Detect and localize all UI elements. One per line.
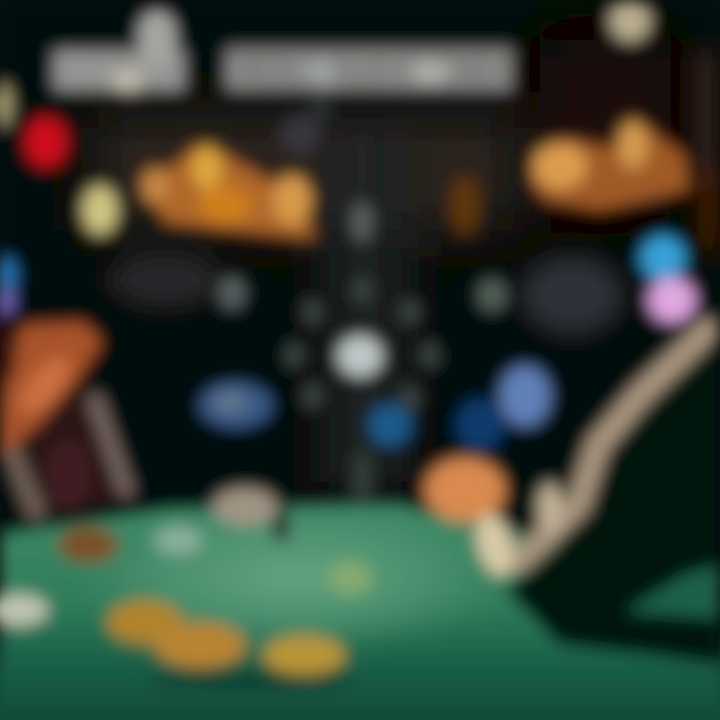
lights: colour panel right: [641, 236, 695, 322]
light: left pale: [0, 83, 12, 127]
chandelier: right: [530, 118, 688, 210]
card stack: [213, 488, 277, 526]
background: dark fill: [0, 0, 720, 560]
title: EXPERIENCE: [226, 48, 512, 95]
right player: wrist: [538, 483, 562, 533]
table: [0, 500, 720, 720]
lights: colour panel left: [0, 257, 16, 314]
card stack: shadow: [272, 509, 290, 543]
panels: dark grey side blobs: [107, 252, 624, 335]
blue lights: [200, 366, 550, 451]
chip: centre: [154, 622, 246, 668]
amber lamp: centre right: [449, 175, 481, 235]
right player: arm: [520, 330, 708, 560]
right player: table gap: [625, 565, 720, 618]
left player: sleeve left: [8, 445, 36, 512]
right player: fingers: [470, 510, 520, 580]
left player: [0, 314, 135, 515]
left player: highlight: [12, 349, 78, 421]
chip: brown: [58, 527, 118, 563]
card: white: [0, 594, 48, 626]
spot: yellow-green: [328, 561, 372, 595]
medallion: core: [338, 336, 382, 376]
title: [54, 10, 512, 124]
card: pale: [154, 526, 202, 554]
left player: dark edge: [0, 314, 16, 386]
chip: right: [263, 635, 345, 675]
table: light pool: [70, 500, 520, 656]
light: top right: [610, 1, 650, 41]
left player: torso: [20, 400, 135, 515]
left player: sleeve right: [95, 400, 126, 490]
right player: hand: [425, 458, 505, 522]
light: yellow: [83, 186, 117, 234]
light: red: [25, 117, 67, 167]
left player: hair: [0, 322, 102, 458]
right player: [425, 330, 720, 665]
chip: left: [107, 600, 183, 644]
background: right wall glow: [695, 50, 720, 250]
title: ONLINE: [54, 48, 184, 95]
objects on table: [0, 488, 372, 689]
right player: body: [505, 335, 720, 665]
chip shadow: [145, 671, 355, 689]
medallion: centre chip: [280, 115, 439, 506]
medallion: spokes: [280, 115, 439, 506]
lights: bokeh: [0, 1, 650, 234]
left player: maroon shirt: [46, 439, 90, 511]
table: felt: [0, 506, 720, 720]
chandelier: left: [142, 145, 315, 238]
background: upper room haze: [90, 40, 670, 500]
